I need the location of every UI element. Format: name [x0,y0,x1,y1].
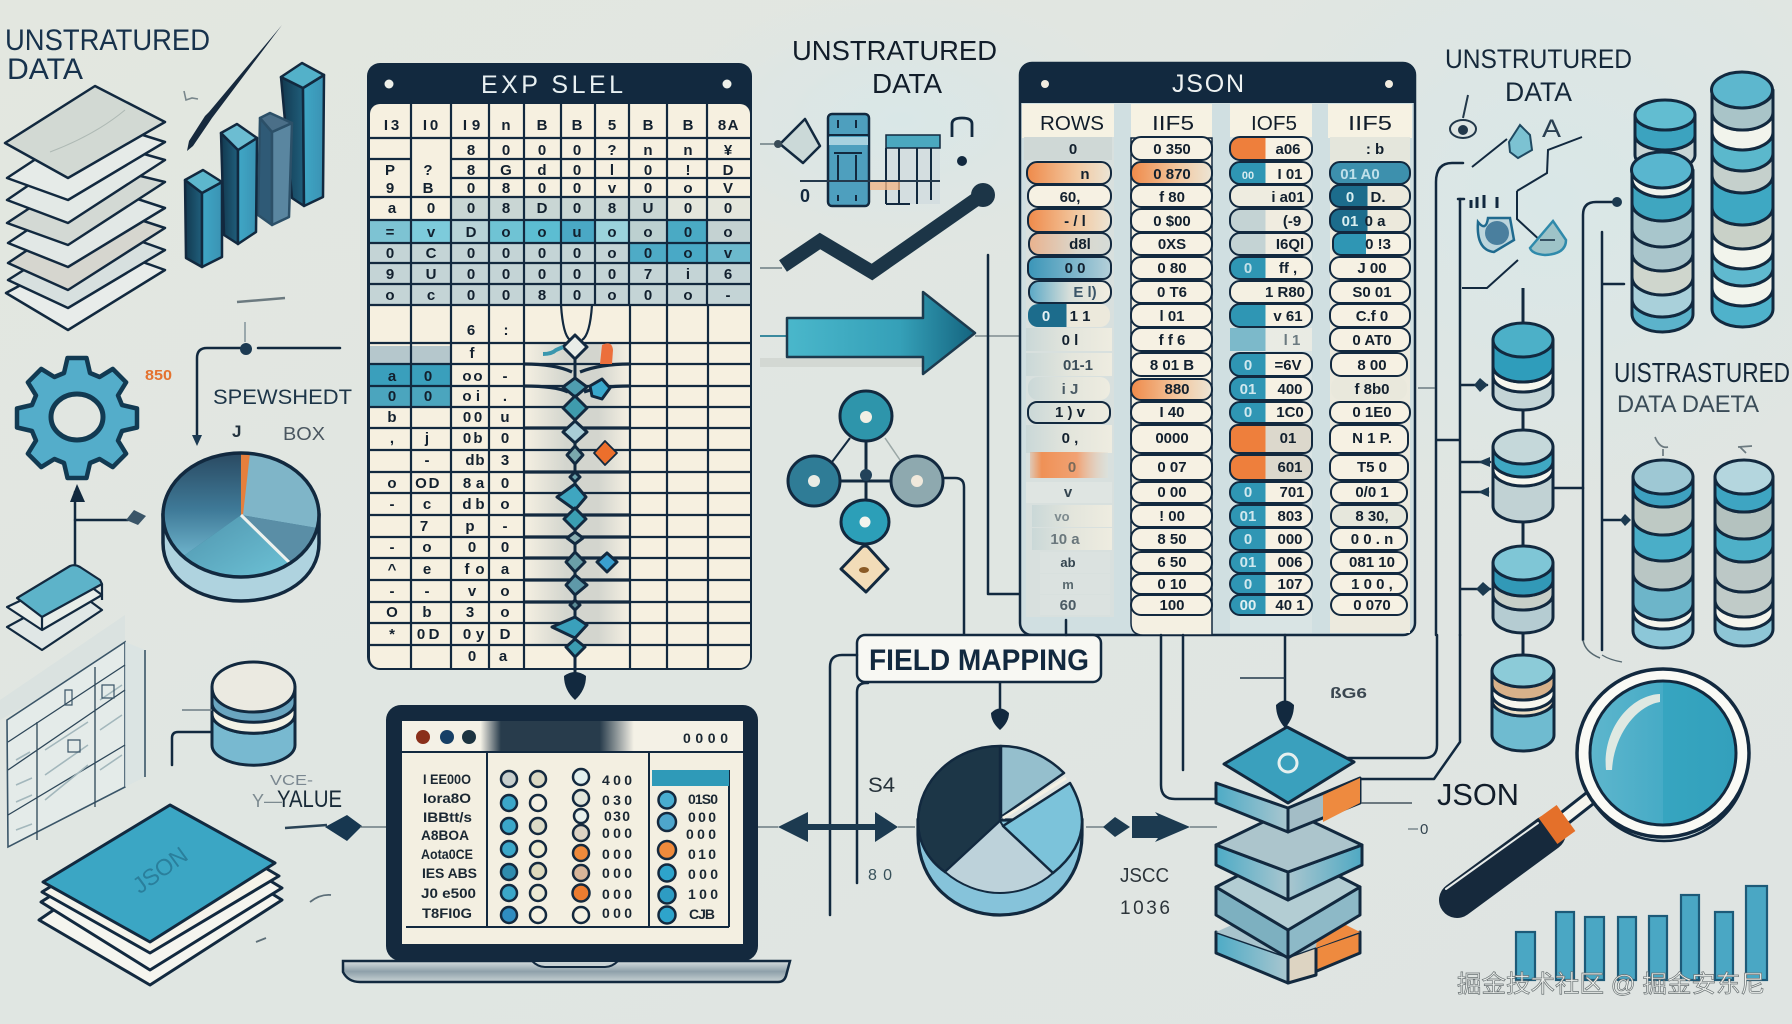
icon: faded sheet document [0,615,145,847]
JSON panel values: 0 , [1062,430,1078,447]
JSON panel values: 0 350 [1153,141,1191,158]
label: JSON, bottom right: JSON [1437,777,1519,812]
cube layer second [1216,810,1362,900]
chart: 3D bars [185,63,324,267]
spreadsheet upper values: 8000?nn¥ [467,142,733,159]
JSON panel values: i a01 [1271,189,1305,206]
JSON panel values: 0 [1244,531,1252,548]
arrow: double-headed, laptop to pie [758,812,915,842]
cube top [1224,727,1354,803]
diagram: scattered icons and lines [1450,95,1582,288]
JSON panel values: T5 0 [1357,459,1387,476]
JSON panel values: 0XS [1158,236,1186,253]
spreadsheet upper values: oc0080o0o- [385,287,730,304]
laptop status markers [501,769,676,924]
cube layer third [1216,850,1360,958]
blob left [1478,218,1514,252]
bar 1 [185,170,222,267]
tinted rows [370,197,750,645]
icon: upper right databases [1632,72,1773,332]
JSON panel values: 0 !3 [1365,236,1391,253]
labels: numbers around pie: 1036 [1120,898,1170,919]
JSON panel values: 0 10 [1157,576,1187,593]
JSON panel values: 6 50 [1157,554,1187,571]
JSON panel values: 8 00 [1357,357,1387,374]
bar 3 [258,113,292,225]
JSON column headers [1022,104,1412,138]
spreadsheet spine with diamonds [552,335,617,690]
watermark: 掘金技术社区 @ 掘金安东尼 [1457,971,1765,998]
JSON panel values: 0 [1244,576,1252,593]
JSON column headers: ROWS [1040,113,1104,135]
JSON column 1 pills [1024,137,1112,615]
node top [840,391,892,441]
JSON panel values: 8 50 [1157,531,1187,548]
labels: numbers around pie: 80 [868,867,892,884]
connector: node to field mapping [943,478,964,635]
spreadsheet lower values: -cdbo [390,496,510,513]
laptop value columns: 000 [686,826,716,842]
JSON panel values: 01-1 [1063,357,1093,374]
icon: JSON book [39,805,282,985]
diagram: scattered icons and lines: A [1542,115,1561,143]
spreadsheet lower values: ^efoa [388,561,510,578]
JSON panel values: I6Ql [1276,236,1304,253]
database 4 [1492,655,1554,751]
heading: unstructured data, top left [5,24,210,86]
laptop value columns: 000 [688,866,718,882]
heading: unstructured data, top right: DATA [1505,77,1572,107]
JSON panel values: v [1064,484,1073,501]
JSON panel values: i J [1062,381,1078,398]
JSON panel values: 0 00 [1157,484,1187,501]
JSON panel values: (-9 [1283,213,1301,230]
pie slice: light teal [182,515,290,577]
labels: numbers around pie: JSCC [1120,865,1169,887]
connectors: field mapping [830,620,1066,915]
spreadsheet lower values: ,j0b0 [390,430,509,447]
label: key value: VCE- [270,772,313,789]
orange marker upper [600,343,613,364]
JSON panel values: 107 [1277,576,1303,593]
database far right tall [1712,72,1773,327]
laptop title bar [402,721,743,752]
label: spreadsheet box: J [232,422,241,441]
JSON panel values: a06 [1275,141,1301,158]
laptop value columns: 000 [602,905,632,921]
callout: field mapping [857,635,1101,682]
JSON panel values: 1 ) v [1055,404,1086,421]
JSON panel values: 880 [1164,381,1190,398]
icon: central database chain [1492,288,1554,751]
icon: isometric cube stack [1216,727,1362,983]
JSON panel values: E l) [1073,284,1097,301]
JSON panel values: 0/0 1 [1355,484,1389,501]
JSON panel values: 0 AT0 [1352,332,1392,349]
JSON panel values: ab [1060,555,1076,570]
connectors: right side database rail [1554,197,1631,662]
label: small number under JSON panel: ßG6 [1330,685,1367,702]
heading: unstructured data, top right [1445,44,1632,107]
JSON panel values: 0 l [1062,332,1078,349]
laptop value columns: 030 [602,792,632,808]
spreadsheet upper values: 9U000007i6 [386,266,732,283]
JSON panel values: 0 [1244,260,1252,277]
cube layer bottom [1216,900,1360,983]
arrow: spreadsheet to laptop [564,672,586,700]
JSON panel values: vo [1054,509,1070,524]
JSON panel values: 0 [1244,484,1252,501]
JSON panel values: 0000 [1155,430,1189,447]
chart: center 3D pie [918,746,1082,915]
JSON panel values: - / l [1064,213,1086,230]
connectors: below JSON panel [1161,635,1460,799]
laptop base [343,961,790,982]
spreadsheet lower values: --vo [390,583,510,600]
JSON panel values: 0 T6 [1157,284,1187,301]
JSON panel values: 01 [1240,554,1256,571]
connectors: right side bus lines [1418,163,1491,635]
JSON panel values: d8l [1069,236,1091,253]
JSON panel values: 0 870 [1153,166,1191,183]
icon: brush line [187,25,282,151]
connector: spreadsheet label line [192,298,340,446]
label: JSON, bottom right: 0 [1420,821,1428,838]
spreadsheet lower values: *0D0yD [389,626,511,643]
JSON panel values: m [1062,577,1074,592]
laptop left labels: IBBtt/s [423,809,472,825]
spreadsheet upper values: 0C0000o0ov [386,245,733,262]
panel: JSON table [1020,63,1415,635]
spreadsheet upper values: =vDoouoo0o [386,224,733,241]
icon: lower right databases [1633,460,1773,648]
JSON panel values: =6V [1274,357,1302,374]
JSON panel values: 000 [1277,531,1303,548]
JSON panel values: 1 1 [1070,308,1090,325]
node bottom [841,500,889,544]
JSON panel values: 0 07 [1157,459,1187,476]
label: key value [252,772,342,813]
spreadsheet lower values: -db3 [424,452,509,469]
JSON panel values: 1 0 0 , [1351,576,1393,593]
database right [1715,460,1773,646]
pie slice: orange sliver [241,453,250,515]
JSON panel values: 0 070 [1353,597,1391,614]
JSON panel values: 0 [1068,459,1076,476]
laptop value columns: 100 [688,886,718,902]
spreadsheet lower values: 7p- [420,518,508,535]
heading: unstructured data, mid right: DATA DAETA [1617,391,1759,418]
database short back [1635,100,1695,170]
laptop divider lines [402,752,743,927]
label: spreadsheet box: SPEWSHEDT [213,386,352,409]
JSON panel values: v 61 [1273,308,1303,325]
arrow: pie to cube stack [1086,812,1217,842]
pie slice: right blue [1003,783,1082,873]
JSON panel values: 803 [1277,508,1303,525]
handle [1446,795,1594,900]
JSON column 3 pills [1230,137,1312,615]
JSON title: JSON [1172,70,1244,98]
JSON panel values: N 1 P. [1352,430,1392,447]
arrow: big teal arrow [760,292,1020,374]
JSON panel values: 081 10 [1349,554,1395,571]
lens glass [1590,681,1736,825]
icon: magnifying glass [1446,669,1749,900]
JSON panel values: 100 [1159,597,1185,614]
database front tall [1632,152,1693,332]
heading: unstructured data, top right: UNSTRUTURED [1445,44,1632,74]
laptop left labels [421,771,477,921]
JSON panel values: n [1080,166,1090,183]
JSON panel values: f 80 [1159,189,1185,206]
icon: small stack with teal top [7,565,102,650]
laptop left labels: IES ABS [422,865,477,881]
callout: field mapping: FIELD MAPPING [869,644,1089,677]
JSON panel values: 0 [1244,357,1252,374]
laptop value columns: 010 [688,846,716,862]
arrow: gear feedback connector [70,484,146,566]
laptop value columns: 000 [602,825,632,841]
node beige [841,546,888,592]
heading: unstructured data, center: DATA [872,68,942,99]
panel: spreadsheet [367,63,752,690]
spreadsheet lower values: 00oi. [388,388,507,405]
JSON panel values: 1C0 [1276,404,1304,421]
connector: database lines [172,710,212,765]
JSON panel values: 8 01 B [1150,357,1194,374]
pie slice: lower right [241,515,317,562]
JSON column headers: IIF5 [1152,113,1194,135]
spreadsheet header row: I3I0I9nBB5BB8A [384,117,739,134]
spreadsheet upper values: 9B0800v0oV [386,180,733,197]
JSON panel values: I 40 [1159,404,1185,421]
spreadsheet title: EXP SLEL [481,71,623,99]
orange diamond [594,441,617,465]
labels: numbers around pie [868,774,1170,919]
JSON panel values: 601 [1277,459,1303,476]
laptop [343,705,790,982]
laptop value columns: 000 [602,865,632,881]
spreadsheet lower values: -o00 [390,539,509,556]
spreadsheet upper values: P?8Gd0l0!D [385,162,734,179]
node left [788,456,840,506]
laptop left labels: Iora8O [423,790,471,806]
JSON panel values: 400 [1277,381,1303,398]
JSON panel values: 0 1E0 [1352,404,1392,421]
laptop left labels: J0 e500 [421,885,476,901]
icon: stack of paper sheets [5,86,165,330]
JSON panel values: 0 80 [1157,260,1187,277]
JSON panel values: 1 R80 [1265,284,1305,301]
JSON column 2 pills [1131,137,1212,615]
laptop value columns [602,770,729,922]
JSON bottom cream block [1131,138,1212,635]
blue diamond [597,553,617,572]
blue marker [590,379,610,399]
label: key value: Y— [252,791,282,811]
pie slice: upper right [241,453,319,528]
laptop value columns: 400 [602,772,632,788]
JSON panel values: 0 [1069,141,1077,158]
icon: small database [212,662,295,765]
heading: unstructured data, center [792,35,997,99]
JSON panel values: ff , [1279,260,1297,277]
marks: squiggles above lower databases [1655,437,1752,456]
database 2 [1493,430,1553,522]
labels: numbers around pie: S4 [868,774,895,797]
JSON panel values: 0 [1346,189,1354,206]
spreadsheet lower values: oOD8a0 [387,475,509,492]
JSON panel values: S0 01 [1352,284,1392,301]
JSON panel values: C.f 0 [1356,308,1388,325]
chart: left 3D pie [163,453,319,601]
JSON panel values: 60, [1060,189,1080,206]
label: orange number: 850 [145,367,172,384]
JSON panel values: 01 [1342,213,1358,230]
laptop value columns: 030 [604,808,630,824]
JSON panel values: 60 [1060,597,1076,614]
laptop left labels: Aota0CE [421,846,473,862]
chart: bottom right bars [1516,886,1767,980]
JSON panel values: 01 [1280,430,1296,447]
JSON panel values: 0 [1244,404,1252,421]
laptop value columns: 000 [602,846,632,862]
pie slice: bottom grey [945,821,1053,893]
laptop left labels: T8FI0G [422,905,472,921]
diagram: connected nodes [788,391,943,592]
JSON panel values: 701 [1279,484,1305,501]
JSON panel values: ! 00 [1159,508,1185,525]
JSON panel values: l 1 [1284,332,1300,349]
heading: unstructured data, center: UNSTRATURED [792,35,997,66]
JSON panel values: 0 a [1365,213,1386,230]
spreadsheet lower values: f [470,345,476,362]
laptop left labels: A8BOA [421,827,469,843]
eye icon [1450,95,1476,138]
database 1 [1493,323,1553,410]
pie slice: dark [163,453,241,557]
icon: small scribble [184,91,198,100]
bars glyph [1471,195,1497,208]
JSON column headers: IIF5 [1348,113,1392,135]
spreadsheet lower values: 0a [468,648,508,665]
heading: unstructured data, top left: DATA [7,53,83,86]
JSON panel values: 8 30, [1355,508,1389,525]
label: key value: YALUE [277,786,342,813]
JSON panel values: 00 [1242,170,1254,182]
database left [1633,460,1693,648]
marks: small scribbles [256,895,331,942]
spreadsheet lower values: Ob3o [386,604,510,621]
JSON panel values: 0 $00 [1153,213,1191,230]
laptop: 0000 [683,730,728,746]
JSON panel values: 00 [1240,597,1256,614]
JSON panel values: 0 0 [1065,260,1085,277]
JSON panel values: 10 a [1050,531,1080,548]
JSON panel values: 40 1 [1275,597,1305,614]
pie slice: top pale [1001,746,1064,817]
JSON panel values: 0 [1042,308,1050,325]
JSON panel values: f 8b0 [1354,381,1390,398]
chart: zigzag trend line [760,183,995,272]
JSON panel values: I 01 [1277,166,1303,183]
connector: vertical bracket to JSON panel [988,255,1020,594]
JSON panel values: 01 A0 [1340,166,1380,183]
mini chart: blue table and small diagram [760,114,972,206]
label: spreadsheet box [213,386,352,444]
cube layer first [1216,778,1360,832]
label: spreadsheet box: BOX [283,424,325,444]
teal blob [1509,125,1532,158]
JSON panel values [1042,141,1395,614]
JSON panel values: 01 [1240,508,1256,525]
spreadsheet lower values: b00u [387,409,510,426]
JSON column 4 pills [1330,137,1410,615]
node right [891,456,943,506]
spreadsheet upper values: a008D08U00 [388,200,732,217]
book label: JSON [128,841,192,899]
mini chart: blue table and small diagram: 0 [800,186,810,206]
JSON panel values: D. [1370,189,1386,206]
lens rim [1580,673,1748,841]
spreadsheet upper values [385,142,734,339]
JSON panel values: 006 [1277,554,1303,571]
pie slice: dark [918,746,1000,872]
blob right [1530,221,1566,255]
heading: unstructured data, top left: UNSTRATURED [5,24,210,57]
laptop value columns: 000 [602,886,632,902]
JSON column headers: IOF5 [1251,113,1297,135]
database 3 [1493,546,1553,633]
JSON panel values: f f 6 [1159,332,1185,349]
spreadsheet grid [370,104,750,668]
JSON panel values: l 01 [1159,308,1185,325]
spreadsheet lower values: a0oo- [388,368,508,385]
heading: unstructured data, mid right [1614,357,1790,418]
laptop value columns: CJB [689,906,715,922]
laptop value columns: 01S0 [688,791,718,807]
laptop left labels: I EE00O [423,771,471,787]
JSON panel values: 0 0 . n [1351,531,1393,548]
spreadsheet upper values: 6: [467,322,508,339]
JSON panel values: : b [1366,141,1384,158]
icon: gear [17,358,137,478]
laptop value columns: 000 [688,809,716,825]
spreadsheet lower values [386,345,511,665]
JSON panel values: 01 [1240,381,1256,398]
bar 4 [281,63,324,206]
arrow: key value diamond [285,815,386,841]
label: JSON, bottom right [1361,777,1519,838]
JSON panel values: J 00 [1357,260,1387,277]
bar 2 [221,124,257,244]
